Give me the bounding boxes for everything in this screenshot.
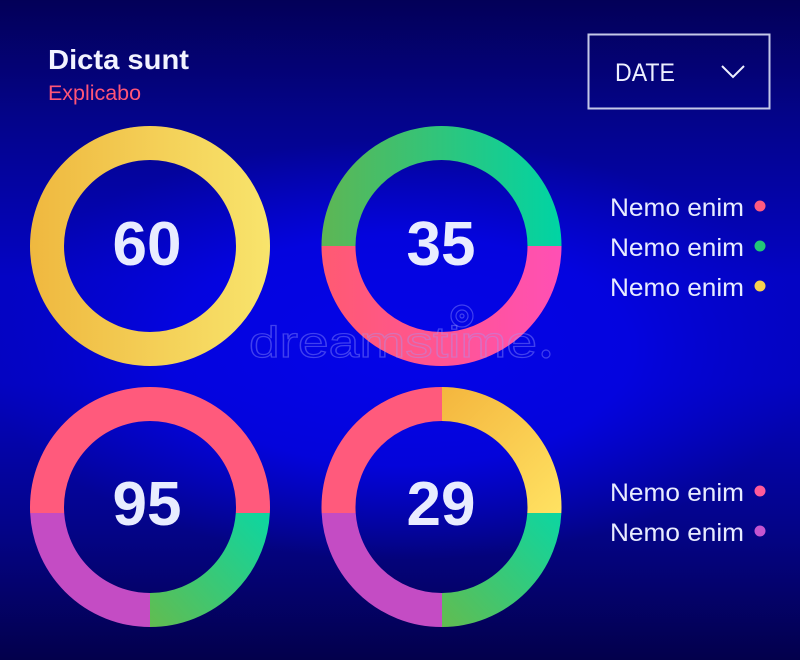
donut chart: 35 xyxy=(338,143,544,349)
legend top xyxy=(610,194,766,302)
date dropdown xyxy=(588,34,770,108)
legend bottom: Nemo enim xyxy=(610,479,744,507)
value 60: 60 xyxy=(113,210,181,279)
donut chart: 95 xyxy=(47,404,253,610)
dropdown label: DATE xyxy=(615,59,675,87)
legend top: Nemo enim xyxy=(610,274,744,302)
watermark xyxy=(249,305,550,367)
legend top: Nemo enim xyxy=(610,194,744,222)
legend bottom: Nemo enim xyxy=(610,519,744,547)
title: Dicta sunt xyxy=(48,44,189,75)
watermark registered mark xyxy=(542,350,550,358)
donut chart: 29 xyxy=(338,404,544,610)
icon: chevron down xyxy=(722,66,744,77)
donut chart: 60 xyxy=(47,143,253,349)
legend top: Nemo enim xyxy=(610,234,744,262)
subtitle: Explicabo xyxy=(48,82,141,105)
watermark: dreamstime xyxy=(249,318,537,367)
watermark spiral xyxy=(451,305,473,327)
legend bottom xyxy=(610,479,766,547)
value 35: 35 xyxy=(407,210,475,279)
value 29: 29 xyxy=(407,470,475,539)
value 95: 95 xyxy=(113,470,181,539)
